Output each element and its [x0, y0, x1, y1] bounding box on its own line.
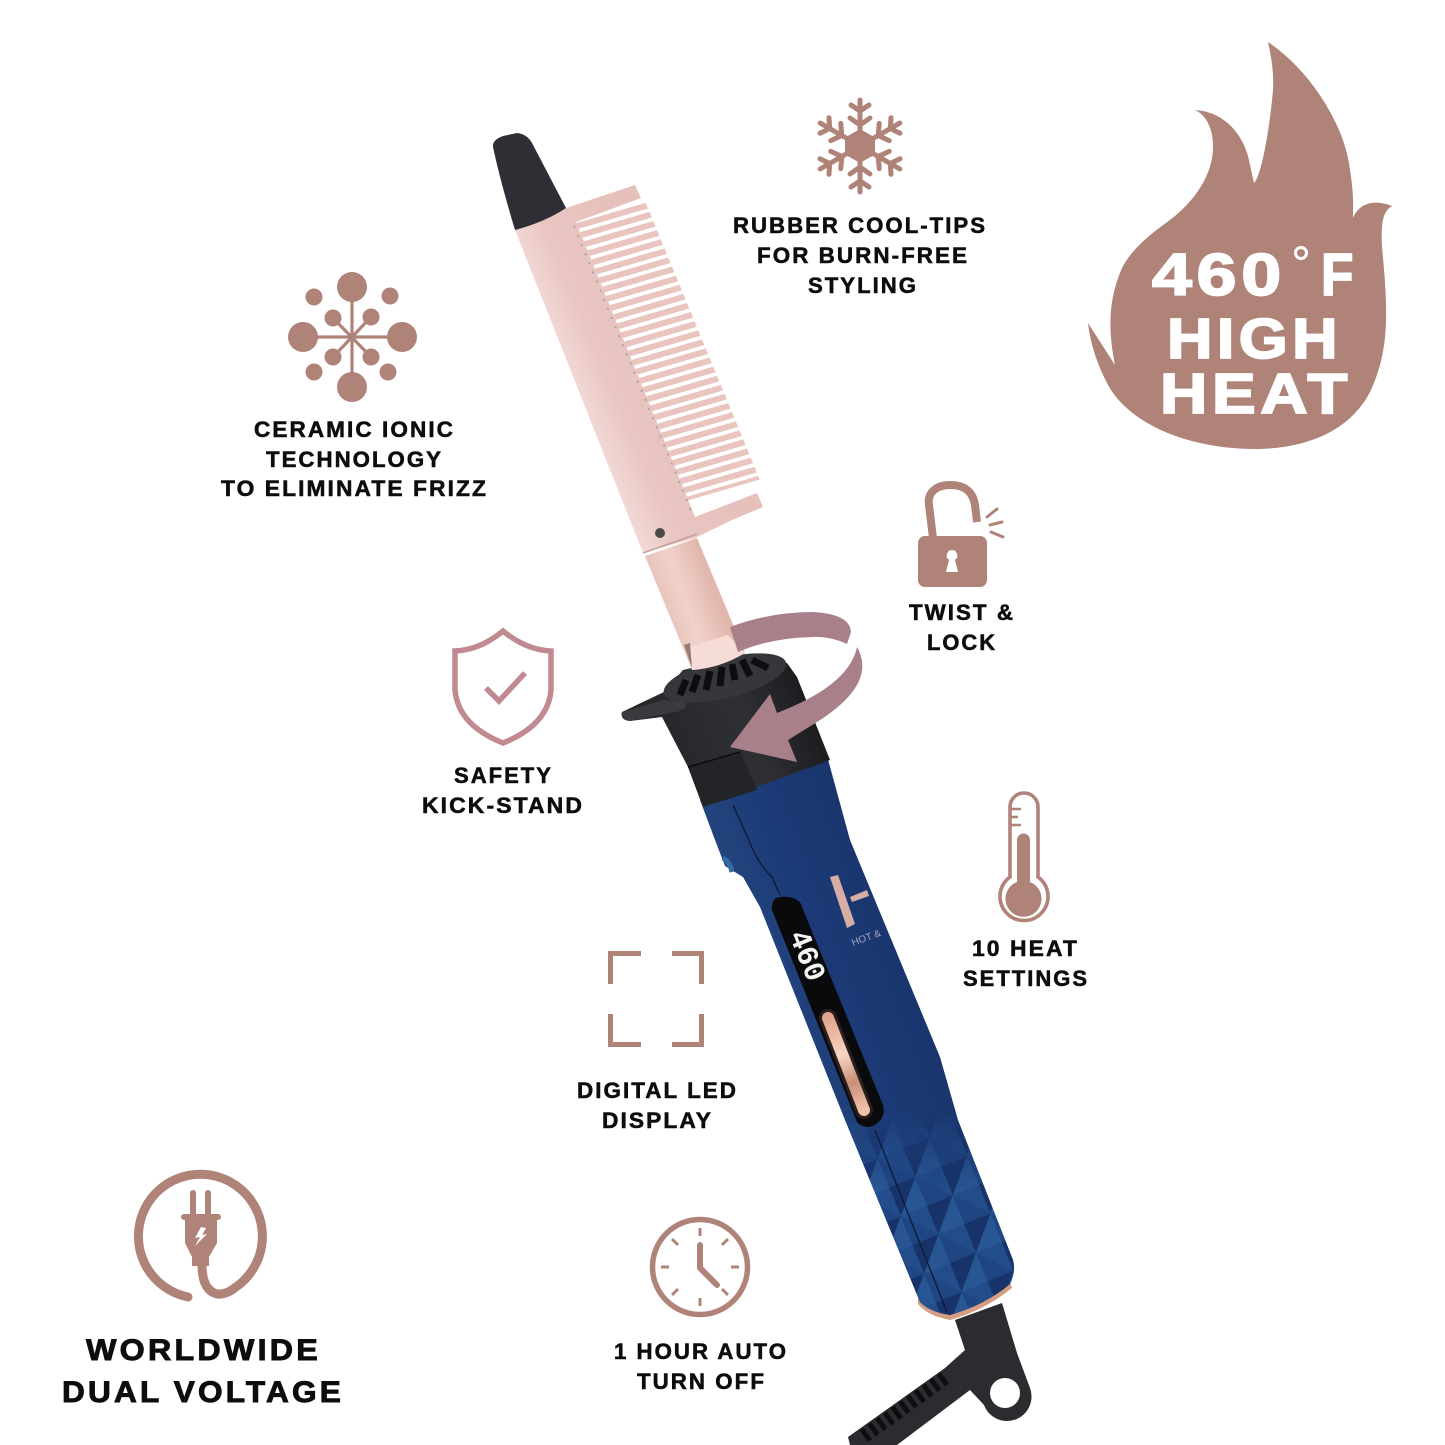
label: DUAL VOLTAGE [62, 1376, 344, 1409]
power cord and strain relief [848, 1303, 1032, 1445]
icon: corner brackets [610, 954, 702, 1044]
comb screw [655, 528, 665, 538]
flame shape [1088, 42, 1392, 449]
label: FOR BURN-FREE [757, 243, 969, 268]
pink comb head [515, 185, 763, 553]
icon: open padlock [918, 485, 1003, 587]
comb teeth [610, 213, 724, 490]
feature: ceramic ionic technology [221, 272, 488, 501]
brand logo on handle: HOT & [850, 928, 883, 949]
icon: shield with check [455, 631, 551, 743]
label: TURN OFF [637, 1369, 766, 1394]
label [909, 600, 1015, 655]
label: STYLING [808, 273, 918, 298]
label [577, 1078, 738, 1133]
feature: digital LED display [577, 954, 738, 1133]
label: 10 HEAT [972, 936, 1079, 961]
label: TECHNOLOGY [266, 447, 443, 472]
rose gold rim [918, 1282, 1012, 1320]
label [422, 763, 584, 818]
badge text: HEAT [1160, 362, 1352, 426]
label: WORLDWIDE [86, 1334, 321, 1367]
label: TWIST & [909, 600, 1015, 625]
feature: 1 hour auto turn off [614, 1220, 788, 1394]
brand logo on handle [830, 875, 883, 949]
label [963, 936, 1089, 991]
label: DISPLAY [602, 1108, 713, 1133]
label: TO ELIMINATE FRIZZ [221, 476, 488, 501]
label [62, 1334, 344, 1409]
pink metal tube [645, 538, 745, 670]
gold control slider [828, 1018, 864, 1110]
tooth root dots [574, 226, 692, 513]
feature: 10 heat settings [963, 793, 1089, 991]
feature: safety kick-stand [422, 631, 584, 818]
black rubber cool tip [493, 133, 566, 230]
product: hot comb styling tool [493, 133, 1060, 1445]
label: DIGITAL LED [577, 1078, 738, 1103]
icon: thermometer [1000, 793, 1048, 920]
icon: clock [652, 1220, 748, 1314]
diamond facets on grip [846, 1122, 1014, 1315]
label: RUBBER COOL-TIPS [733, 213, 987, 238]
feature: rubber cool-tips [733, 100, 987, 298]
label [221, 417, 488, 501]
label: CERAMIC IONIC [254, 417, 455, 442]
icon: snowflake [815, 100, 905, 192]
twist direction arrow [730, 612, 862, 762]
LED temperature readout: 460 [780, 926, 831, 987]
icon: plug with cord [138, 1174, 262, 1297]
label [733, 213, 987, 298]
label: SAFETY [454, 763, 553, 788]
label: KICK-STAND [422, 793, 584, 818]
flame badge: 460 F high heat [1088, 42, 1392, 449]
badge text: 460 [1152, 242, 1286, 308]
black collar with kickstand [622, 643, 830, 807]
feature: worldwide dual voltage [62, 1174, 344, 1409]
badge text: HIGH [1167, 307, 1342, 371]
label: 1 HOUR AUTO [614, 1339, 788, 1364]
vented top ring [659, 643, 791, 713]
digital display panel [772, 897, 884, 1127]
blue handle [700, 760, 1014, 1315]
badge text [1152, 242, 1357, 426]
label: LOCK [927, 630, 997, 655]
label [614, 1339, 788, 1394]
badge text: F [1321, 242, 1357, 308]
nub and seams [723, 858, 732, 872]
icon: ion molecule [288, 272, 417, 402]
label: SETTINGS [963, 966, 1089, 991]
feature: twist and lock [909, 485, 1015, 655]
